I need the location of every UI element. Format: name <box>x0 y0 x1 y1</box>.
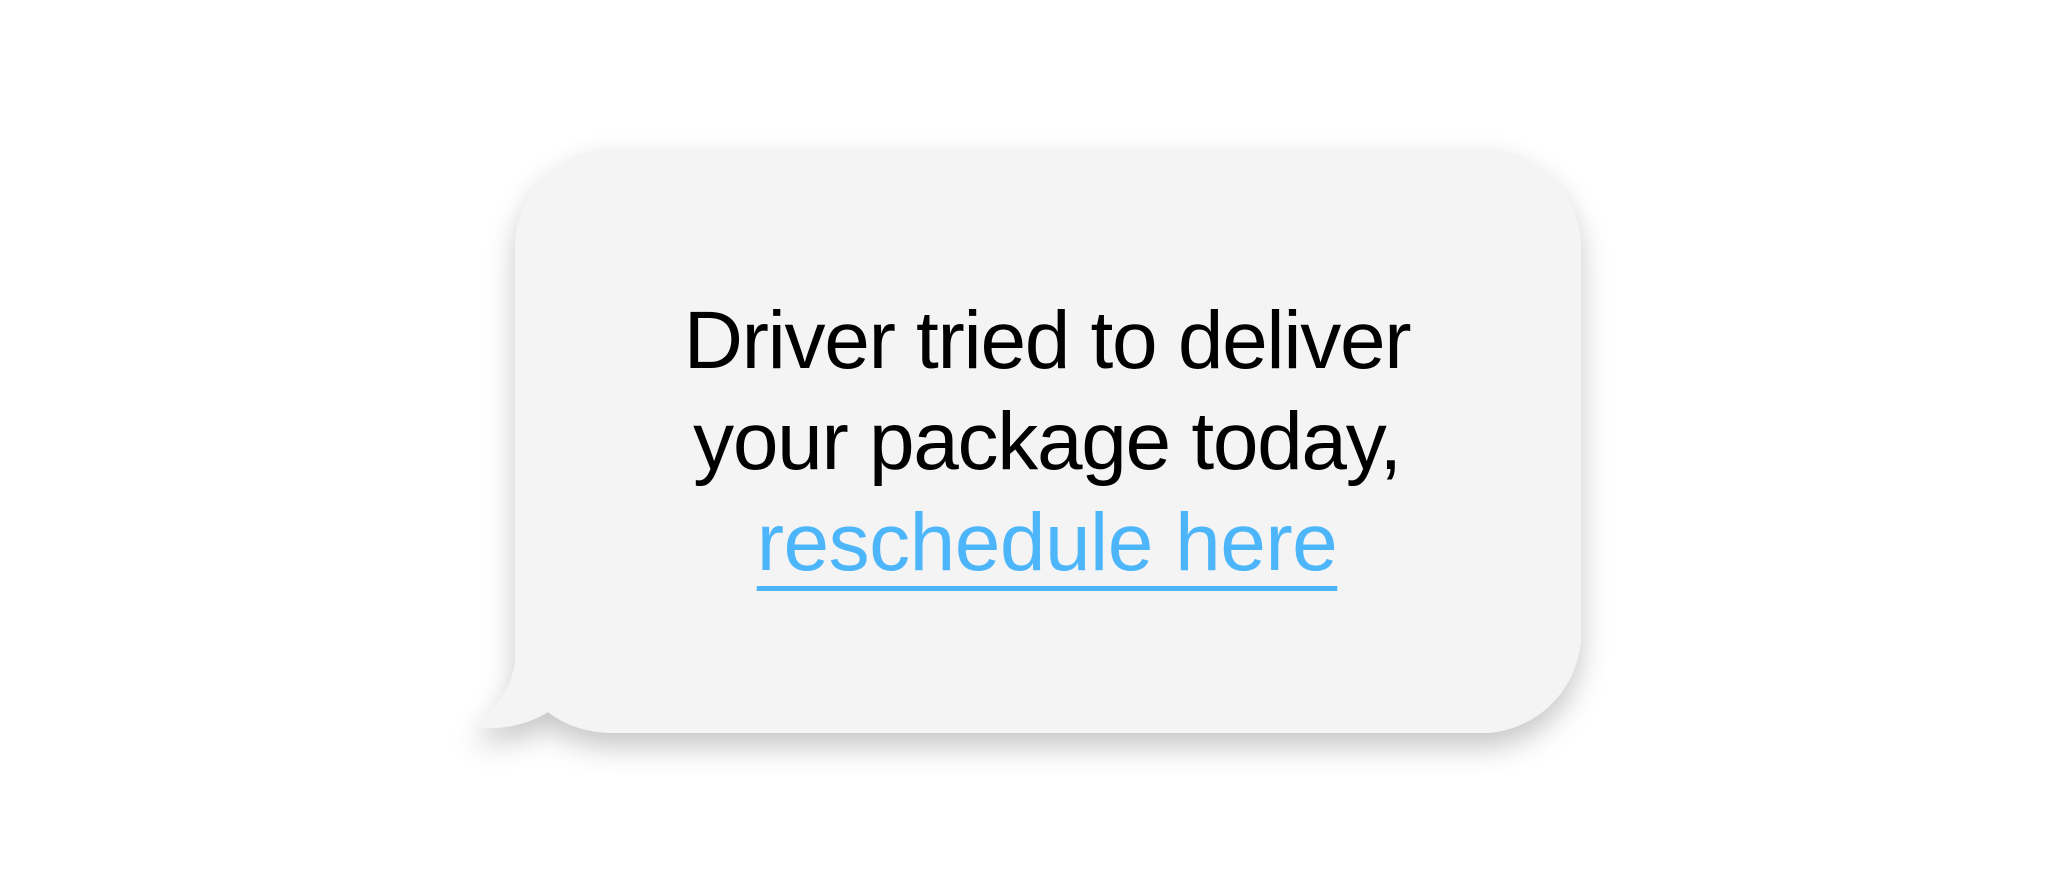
message text: reschedule here <box>757 497 1337 588</box>
message text: Driver tried to deliver <box>684 295 1410 386</box>
message text: your package today, <box>693 396 1401 487</box>
message text <box>684 295 1410 591</box>
